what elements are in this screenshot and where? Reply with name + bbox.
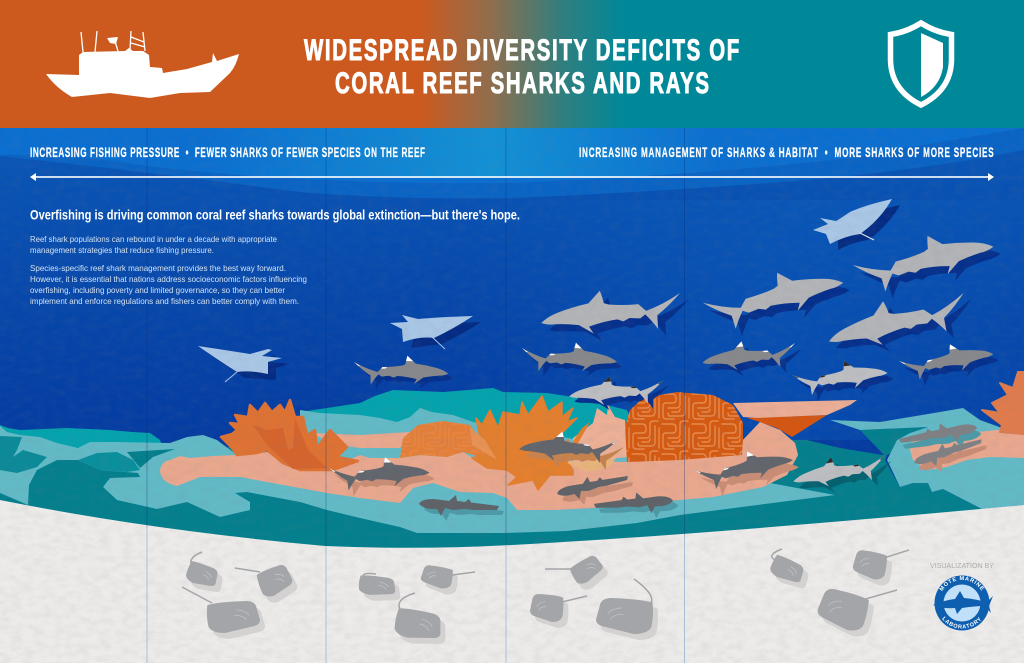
coral: brain orange left bbox=[400, 421, 497, 462]
logo: Mote Marine Laboratory bbox=[933, 576, 993, 630]
direction banner right text: INCREASING MANAGEMENT OF SHARKS & HABITAT • MORE SHARKS OF MORE SPECIES bbox=[579, 146, 994, 161]
title bbox=[304, 34, 739, 100]
ray group left bbox=[182, 552, 300, 639]
large grey sharks bbox=[538, 235, 1001, 389]
nurse sharks bbox=[419, 419, 990, 521]
ray group centre left bbox=[357, 565, 475, 652]
ray group right bbox=[767, 549, 909, 639]
manta ray top right bbox=[813, 199, 900, 250]
body paragraphs: However, it is essential that nations address socioeconomic factors influencing bbox=[30, 274, 307, 284]
credit: visualization by: VISUALIZATION BY bbox=[930, 561, 994, 570]
body paragraphs: Species-specific reef shark management provides the best way forward. bbox=[30, 263, 286, 273]
coral: pale branching bbox=[567, 405, 627, 472]
double-headed arrow bbox=[30, 173, 994, 181]
mantas bbox=[198, 199, 900, 382]
body paragraphs: overfishing, including poverty and limited governance, so they can better bbox=[30, 285, 285, 295]
coral: branching orange left bbox=[221, 400, 358, 470]
seabed sand bbox=[0, 500, 1024, 663]
dark teal base bbox=[0, 440, 1024, 550]
peach finger reef with orange underside bbox=[733, 400, 857, 437]
peach reef bbox=[160, 422, 1024, 510]
title: WIDESPREAD DIVERSITY DEFICITS OF bbox=[304, 34, 739, 67]
coral: branching orange centre bbox=[470, 396, 577, 490]
column dividers bbox=[147, 128, 684, 663]
logo: Mote Marine Laboratory: MOTE MARINE bbox=[939, 576, 984, 592]
direction banner left text: INCREASING FISHING PRESSURE • FEWER SHARKS OF FEWER SPECIES ON THE REEF bbox=[30, 146, 425, 161]
light aqua reef bbox=[0, 408, 1024, 533]
logo: Mote Marine Laboratory: LABORATORY bbox=[942, 616, 981, 629]
manta ray left bbox=[198, 346, 290, 382]
icon: fishing boat bbox=[46, 31, 239, 98]
body paragraphs: implement and enforce regulations and fishers can better comply with them. bbox=[30, 296, 299, 306]
peach base over dome bbox=[627, 422, 798, 480]
heading: Overfishing is driving common coral reef sharks towards global extinction—but there's hope. bbox=[30, 206, 520, 222]
coral: brain dome bbox=[625, 392, 743, 462]
ray group centre right bbox=[530, 553, 658, 640]
coral: branching right bbox=[982, 372, 1024, 434]
medium grey sharks with white tips bbox=[349, 324, 999, 409]
icon: shield bbox=[890, 23, 952, 105]
body paragraphs bbox=[30, 234, 307, 306]
teal rock shapes left bbox=[0, 436, 175, 473]
body paragraphs: management strategies that reduce fishing pressure. bbox=[30, 245, 214, 255]
ocean background bbox=[0, 128, 1024, 548]
reef bbox=[0, 372, 1024, 550]
header band bbox=[0, 0, 1024, 128]
light grey sharks with black tips bbox=[567, 355, 898, 516]
title: CORAL REEF SHARKS AND RAYS bbox=[335, 67, 709, 100]
dark sharks over reef with white tips bbox=[326, 420, 799, 511]
manta ray centre bbox=[390, 315, 481, 349]
back teal reef bbox=[0, 388, 640, 480]
stingrays on sand bbox=[182, 549, 909, 652]
text block bbox=[30, 206, 520, 306]
body paragraphs: Reef shark populations can rebound in under a decade with appropriate bbox=[30, 234, 277, 244]
reef sharks bbox=[326, 235, 1001, 521]
